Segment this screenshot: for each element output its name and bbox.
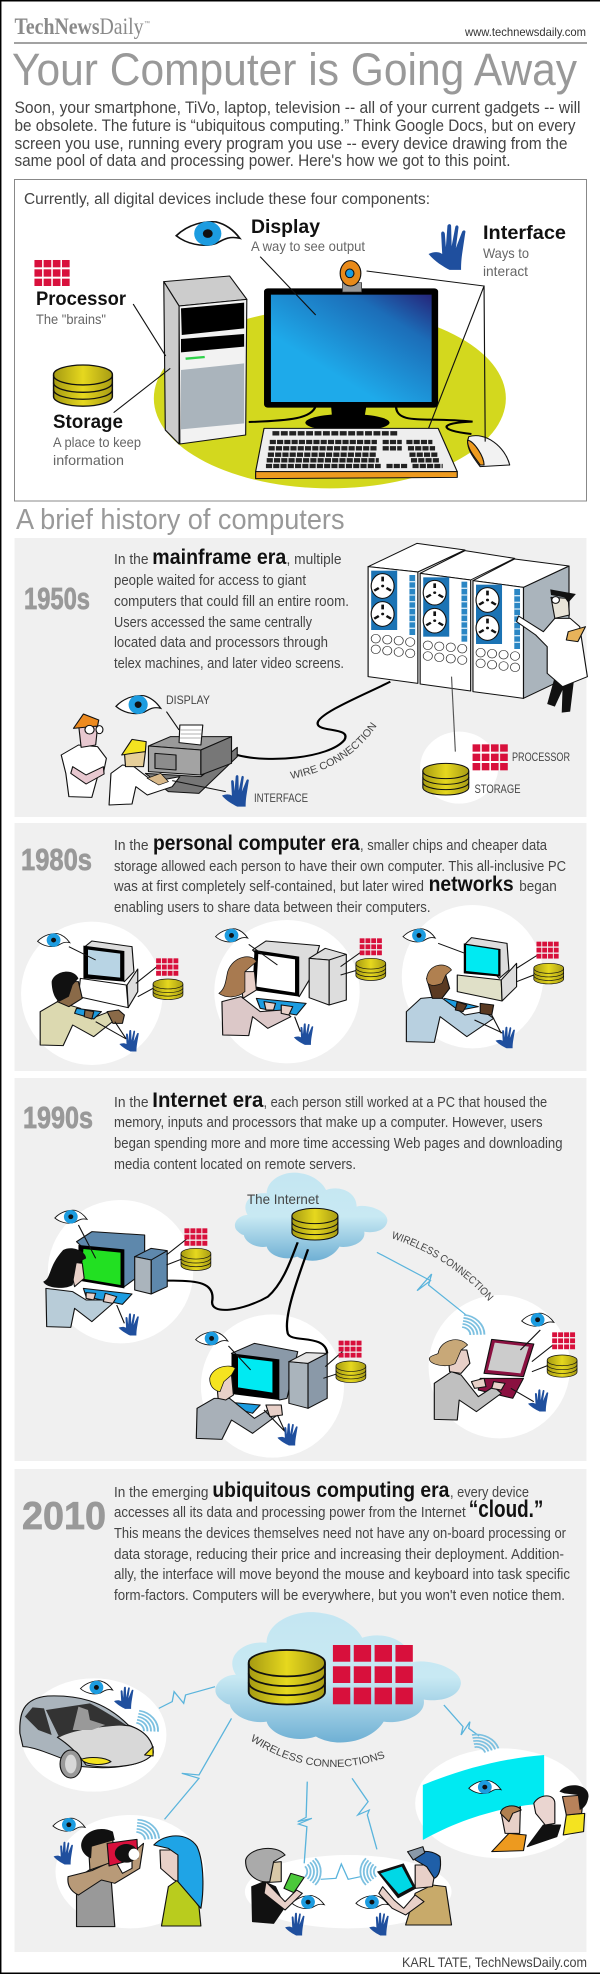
icon: storage stack [54, 365, 112, 406]
panel: four components [14, 180, 586, 501]
panel: 1950s [14, 538, 588, 817]
illustration: cloud and devices [20, 1612, 589, 1935]
label: processor: Processor [36, 289, 127, 310]
seated operator [109, 739, 180, 805]
heading: brief history: A brief history of computers [16, 504, 344, 536]
header rule [14, 42, 587, 44]
era text: ubiquitous computing era [212, 1479, 450, 1502]
mainframe cabinets [368, 543, 569, 698]
component labels [166, 693, 570, 805]
webcam [340, 261, 362, 292]
icon: eye [176, 221, 240, 246]
title: Your Computer is Going Away [12, 44, 577, 95]
label: interface: Interface [483, 223, 566, 244]
component labels: PROCESSOR [512, 750, 570, 764]
leader lines [114, 257, 485, 442]
label: storage: Storage [53, 412, 123, 433]
era text: Users accessed the same centrally [114, 615, 313, 631]
interface leader [172, 781, 226, 792]
era text: mainframe era [152, 546, 287, 569]
telex machine [145, 725, 237, 793]
label: processor: The "brains" [36, 311, 106, 327]
era text: memory, inputs and processors that make up a computer. However, users [114, 1115, 543, 1131]
icon: cloud storage [249, 1650, 325, 1704]
header: website url: www.technewsdaily.com [464, 25, 586, 39]
era text: In the [114, 552, 148, 568]
era text: personal computer era [153, 832, 360, 855]
photographer [68, 1829, 143, 1927]
wire connection label: WIRE CONNECTION [290, 722, 376, 778]
icon: internet storage [292, 1208, 338, 1240]
icon: storage [423, 763, 469, 795]
scientist [517, 589, 587, 713]
era text: In the emerging [114, 1485, 208, 1501]
icon: processor grid [34, 260, 70, 286]
cloud label: The Internet [247, 1191, 319, 1207]
user with laptop [429, 1313, 577, 1420]
icon: hand [429, 224, 465, 270]
era text: people waited for access to giant [114, 573, 306, 589]
illustration: internet network [43, 1173, 577, 1458]
user with cyan screen [196, 1332, 366, 1445]
label: storage: A place to keep [53, 434, 141, 450]
era text: In the [114, 838, 148, 854]
cloud: the internet [235, 1173, 387, 1261]
era text: media content located on remote servers. [114, 1157, 356, 1173]
era text: , smaller chips and cheaper data [360, 838, 548, 854]
era text: located data and processors through [114, 635, 328, 651]
icon: cloud processors [333, 1645, 413, 1704]
header: logo: ™ [144, 20, 150, 27]
era text: , multiple [286, 552, 342, 568]
label: display: Display [251, 217, 320, 238]
era text: form-factors. Computers will be everywhere, but you won't even notice them. [114, 1588, 565, 1604]
label: interface: Ways to [483, 245, 529, 261]
era text: began spending more and more time accessing Web pages and downloading [114, 1136, 562, 1152]
panel: 1990s [14, 1078, 586, 1461]
user with green screen [43, 1210, 211, 1335]
icon: wifi waves [456, 1311, 489, 1341]
leader line [452, 677, 455, 752]
keyboard [256, 428, 457, 479]
cables [167, 1242, 327, 1353]
tower case [164, 276, 247, 444]
illustration: three PC users [21, 905, 564, 1065]
label: storage: information [53, 452, 124, 468]
era text: was at first completely self-contained, but later wired [113, 879, 424, 895]
wireless connection label: WIRELESS CONNECTION [393, 1231, 494, 1301]
era text: enabling users to share data between their computers. [114, 900, 430, 916]
wireless connections label: WIRELESS CONNECTIONS [252, 1734, 384, 1767]
label: interface [483, 223, 566, 279]
person with tablet [377, 1847, 452, 1925]
woman with blue hair [154, 1836, 203, 1926]
year label: 2010 [22, 1495, 106, 1538]
era text [114, 1089, 562, 1173]
display leader [166, 712, 179, 730]
user 3 [402, 905, 564, 1048]
car [20, 1696, 153, 1778]
era text: , each person still worked at a PC that housed the [264, 1095, 547, 1111]
standing man [61, 714, 106, 797]
illustration: mainframe scene [61, 543, 587, 807]
cables [249, 406, 473, 434]
era text: Internet era [152, 1089, 264, 1112]
icon: eye [116, 695, 161, 714]
icon: hand [222, 775, 249, 807]
label: interface: interact [483, 263, 528, 279]
era text [113, 832, 566, 916]
era text: In the [114, 1095, 148, 1111]
intro paragraph: same pool of data and processing power. Here's how we got to this point. [14, 151, 510, 170]
era text: telex machines, and later video screens. [114, 656, 344, 672]
user 2 [214, 920, 386, 1063]
user 1 [21, 922, 183, 1065]
era text [114, 546, 349, 672]
wire connection [237, 682, 390, 759]
panel: 1980s [14, 823, 586, 1071]
component labels: DISPLAY [166, 693, 210, 707]
icon: processor [473, 744, 508, 770]
large cyan screen [423, 1755, 544, 1840]
eyes and hands: handheld users [53, 1681, 389, 1935]
era text: accesses all its data and processing power from the Internet [114, 1505, 466, 1521]
era text: ally, the interface will move beyond the mouse and keyboard into task specific [114, 1567, 570, 1583]
year label: 1980s [21, 842, 92, 877]
era text: , every device [450, 1485, 529, 1501]
era text: computers that could fill an entire room. [114, 594, 349, 610]
label: storage [53, 412, 141, 468]
panel intro text: Currently, all digital devices include these four components: [24, 191, 430, 208]
audience [492, 1785, 589, 1852]
label: display [251, 217, 365, 254]
wireless link [377, 1252, 466, 1315]
label: display: A way to see output [251, 238, 365, 254]
year label: 1950s [24, 581, 90, 616]
mouse [468, 436, 510, 467]
era text [114, 1479, 570, 1604]
component labels: INTERFACE [254, 791, 308, 805]
panel: 2010 [14, 1469, 588, 1952]
era text: began [519, 879, 557, 895]
label: processor [36, 289, 127, 327]
era text: data storage, reducing their price and increasing their deployment. Addition- [114, 1547, 564, 1563]
wireless links [159, 1687, 479, 1879]
computer illustration [34, 221, 510, 488]
era text: “cloud.” [469, 1496, 543, 1523]
component labels: STORAGE [474, 782, 520, 796]
icon: eye on screen [469, 1780, 501, 1794]
cloud: computing [215, 1612, 461, 1742]
era text: networks [429, 873, 514, 896]
person with phone [246, 1848, 304, 1923]
header: logo: TechNewsDaily [14, 14, 144, 39]
year label: 1990s [23, 1100, 93, 1135]
wifi waves [130, 1708, 501, 1885]
monitor [264, 288, 438, 431]
intro paragraph [14, 98, 580, 170]
